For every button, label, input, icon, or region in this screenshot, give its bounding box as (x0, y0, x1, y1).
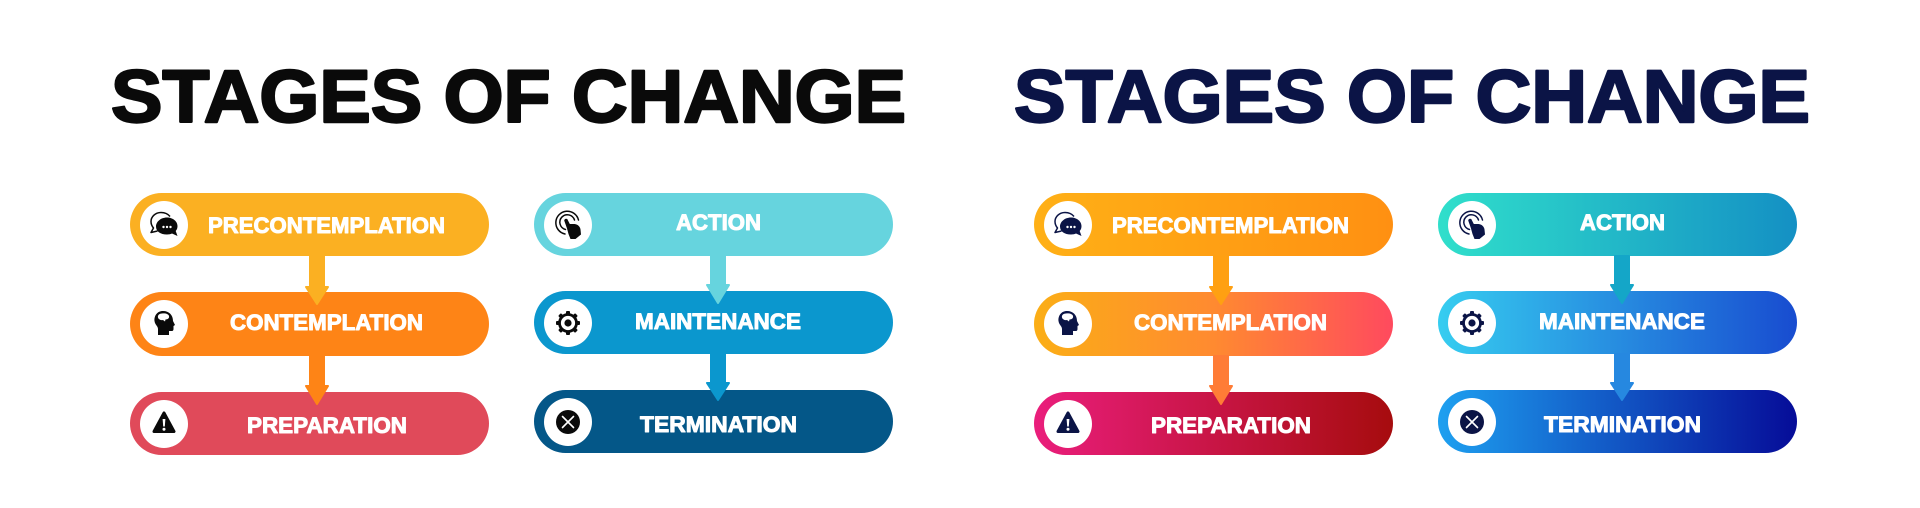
pill: action gradient (1438, 193, 1797, 256)
title: navy: STAGES OF CHANGE (1014, 55, 1810, 138)
pill: maintenance gradient: MAINTENANCE (1539, 309, 1705, 334)
arrow: contemplation to preparation gradient (1210, 356, 1232, 404)
pill: contemplation (130, 292, 489, 356)
pill: contemplation gradient: CONTEMPLATION (1134, 310, 1327, 335)
pill: preparation gradient: PREPARATION (1151, 413, 1311, 438)
pill: precontemplation: PRECONTEMPLATION (208, 213, 445, 238)
pill: termination gradient: TERMINATION (1544, 412, 1701, 437)
arrow: contemplation to preparation (306, 356, 328, 404)
pill: preparation (130, 392, 489, 455)
pill: action gradient: ACTION (1580, 210, 1665, 235)
pill: maintenance gradient (1438, 291, 1797, 354)
pill: action: ACTION (676, 210, 761, 235)
panel: black and flat colour version (111, 55, 906, 455)
pill: precontemplation gradient (1034, 193, 1393, 256)
pill: maintenance (534, 291, 893, 354)
arrow: maintenance to termination gradient (1611, 354, 1633, 400)
arrow: precontemplation to contemplation gradient (1210, 256, 1232, 304)
pill: termination (534, 390, 893, 453)
pill: action (534, 193, 893, 256)
pill: maintenance: MAINTENANCE (635, 309, 801, 334)
pill: preparation: PREPARATION (247, 413, 407, 438)
pill: precontemplation (130, 193, 489, 256)
arrow: maintenance to termination (707, 354, 729, 400)
arrow: precontemplation to contemplation (306, 256, 328, 304)
pill: contemplation gradient (1034, 292, 1393, 356)
pill: precontemplation gradient: PRECONTEMPLATION (1112, 213, 1349, 238)
pill: contemplation: CONTEMPLATION (230, 310, 423, 335)
title: black: STAGES OF CHANGE (111, 55, 906, 138)
arrow: action to maintenance (707, 256, 729, 303)
pill: termination gradient (1438, 390, 1797, 453)
panel: navy and gradient colour version (1014, 55, 1810, 455)
pill: termination: TERMINATION (640, 412, 797, 437)
pill: preparation gradient (1034, 392, 1393, 455)
arrow: action to maintenance gradient (1611, 256, 1633, 303)
